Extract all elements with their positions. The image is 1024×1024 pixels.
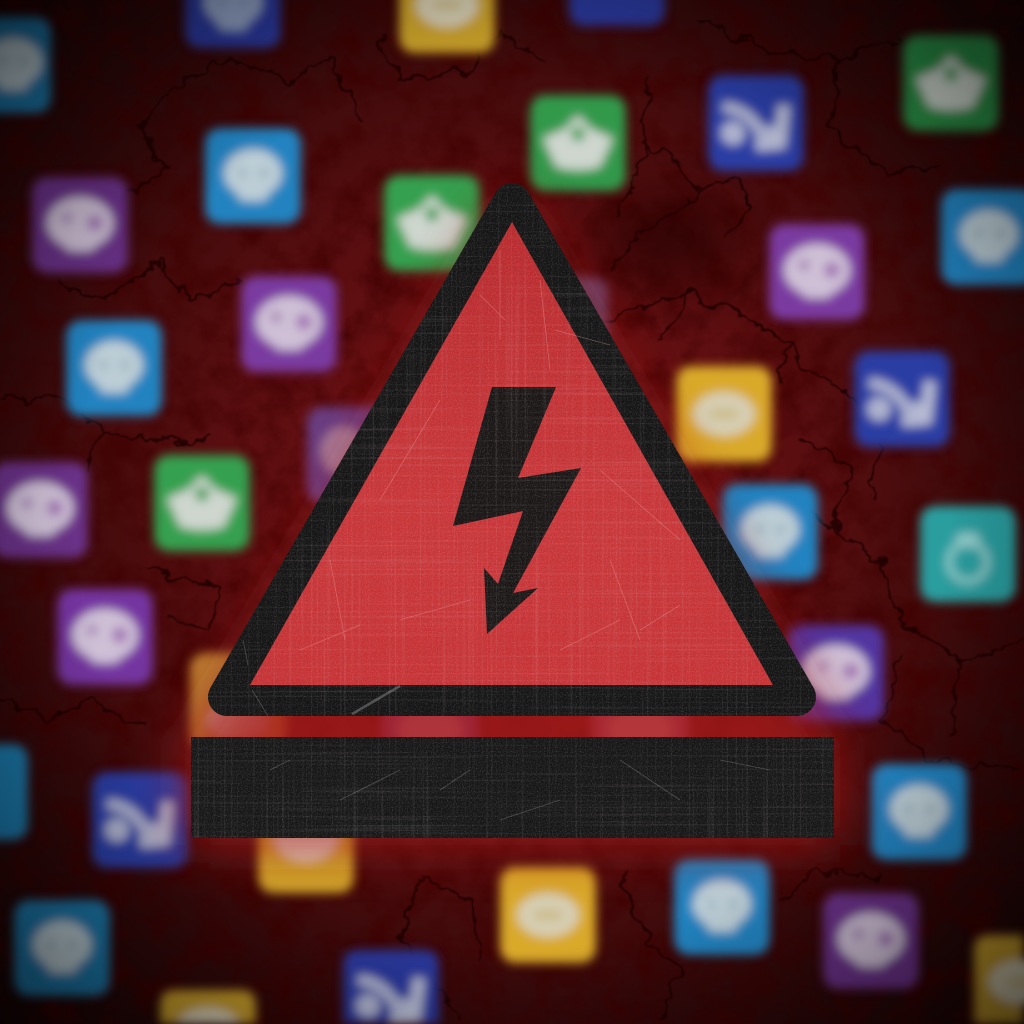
icon: green top right [903,35,999,131]
icon: purple left [0,462,88,558]
icon: green left [154,455,250,551]
icon: purple [32,177,128,273]
icon: navy right [854,351,950,447]
icon: navy [708,75,804,171]
icon: blue left edge [0,744,28,840]
black label bar [191,737,834,838]
icon: yellow bottom right [974,935,1024,1024]
icon: purple-navy right [788,625,884,721]
icon: navy top edge [569,0,665,26]
icon: green near triangle [384,175,480,271]
icon: yellow top [399,0,495,53]
icon: yellow [676,366,772,462]
icon: green [530,95,626,191]
grain and scratches on sign [180,170,840,850]
dark patch upper right [595,195,735,285]
icon: blue right [941,189,1024,285]
icon: blue bottom left [14,900,110,996]
icon: navy bottom [343,950,439,1024]
icon: blue [674,859,770,955]
icon: blue [66,320,162,416]
icon: navy top [185,0,281,48]
icon: navy [92,772,188,868]
icon: purple behind sign [382,672,478,768]
icon: yellow [500,867,596,963]
red glow behind sign [185,190,840,845]
icon: yellow bottom [160,990,256,1024]
icon: blue skull top left [0,17,51,113]
icon: blue right of triangle [722,484,818,580]
icon: amber behind sign [190,653,286,749]
warning triangle [227,202,797,697]
icon: purple swirl [241,276,337,372]
icon: lightning bolt [453,387,581,634]
icon: yellow under bar [258,797,354,893]
icon: purple [57,589,153,685]
icon: blue right [871,764,967,860]
icon: teal ring [920,506,1016,602]
icon: purple behind triangle [307,407,403,503]
icon: pink behind sign [592,672,688,768]
triangle black border [227,202,797,697]
icon: blue [205,128,301,224]
icon: purple [823,893,919,989]
icon: hidden lilac behind triangle [512,277,608,373]
triangle red fill [250,222,773,685]
icon: purple right [769,224,865,320]
